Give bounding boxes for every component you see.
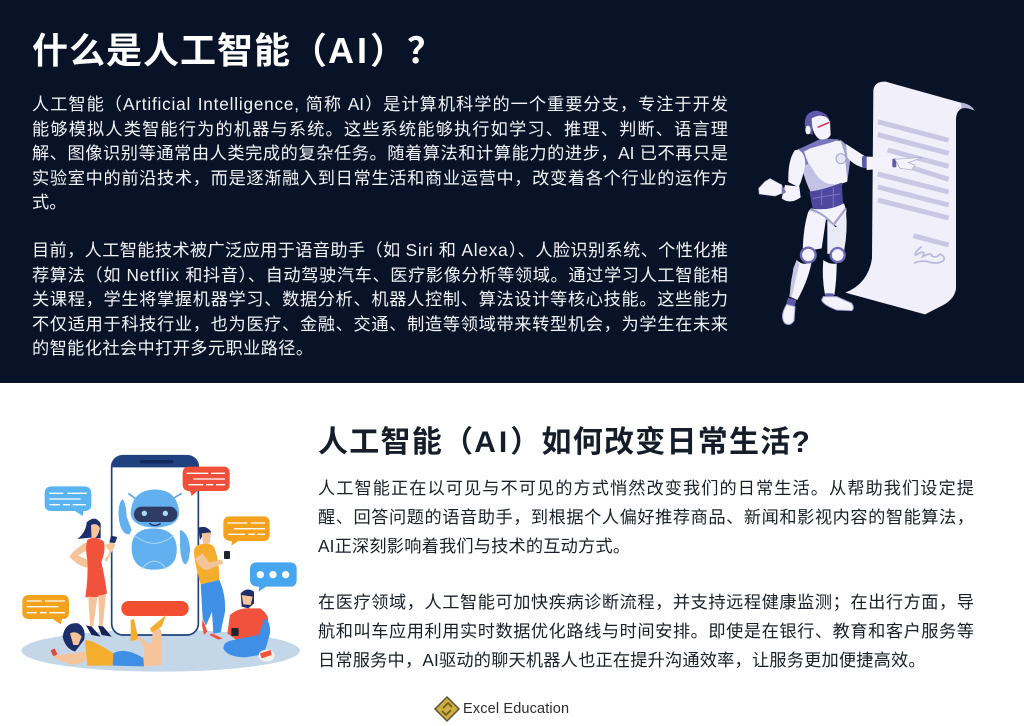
- person: standing man in yellow: [194, 527, 230, 640]
- heading: AI in daily life: 人工智能（AI）如何改变日常生活?: [318, 426, 811, 459]
- text block: AI definition: 式。: [32, 192, 66, 212]
- speech bubble: red top: [183, 467, 230, 496]
- text block: healthcare and transport: 航和叫车应用利用实时数据优化路线与时间安排。即使是在银行、教育和客户服务等: [318, 621, 974, 641]
- text block: daily life intro: 人工智能正在以可见与不可见的方式悄然改变我们的日常生活。从帮助我们设定提: [318, 478, 974, 498]
- speech bubble: orange left: [22, 595, 69, 624]
- brand name: Excel Education: [463, 701, 569, 717]
- speech bubble: blue left: [45, 486, 91, 516]
- ground ellipse: [21, 630, 300, 672]
- text block: AI applications: 目前，人工智能技术被广泛应用于语音助手（如 Siri 和 Alexa）、人脸识别系统、个性化推: [32, 240, 728, 260]
- person: woman lying down: [50, 615, 166, 666]
- text block: AI applications: [32, 240, 728, 358]
- document scroll: [845, 82, 974, 314]
- text block: daily life intro: 醒、回答问题的语音助手，到根据个人偏好推荐商品、新闻和影视内容的智能算法，: [318, 507, 974, 527]
- text block: AI definition: 解、图像识别等通常由人类完成的复杂任务。随着算法和计算能力的进步，AI 已不再只是: [32, 143, 728, 163]
- text block: AI applications: 的智能化社会中打开多元职业路径。: [32, 338, 313, 358]
- text block: healthcare and transport: 在医疗领域，人工智能可加快疾病诊断流程，并支持远程健康监测；在出行方面，导: [318, 592, 974, 612]
- speech bubble: blue dots: [250, 562, 297, 592]
- text block: AI definition: [32, 94, 728, 212]
- text block: daily life intro: [318, 478, 974, 556]
- text block: daily life intro: AI正深刻影响着我们与技术的互动方式。: [318, 536, 630, 556]
- text block: healthcare and transport: 日常服务中，AI驱动的聊天机器人也正在提升沟通效率，让服务更加便捷高效。: [318, 650, 926, 670]
- footer logo: Excel Education: [434, 696, 569, 722]
- illustration: robot pointing at document: [758, 82, 974, 325]
- person: seated man in red: [223, 590, 275, 662]
- text block: AI definition: 实验室中的前沿技术，而是逐渐融入到日常生活和商业运营中，改变着各个行业的运作方: [32, 168, 728, 188]
- person: woman in red dress: [69, 519, 117, 637]
- robot figure: [759, 111, 923, 325]
- title: 什么是人工智能（AI）？: [32, 30, 444, 71]
- panel: dark header section: [0, 0, 1024, 383]
- illustration: people chatting with phone chatbot: [21, 454, 300, 672]
- icon: gold diamond: [434, 696, 460, 722]
- speech bubble: orange right: [223, 516, 270, 546]
- text block: AI definition: 能够模拟人类智能行为的机器与系统。这些系统能够执行如学习、推理、判断、语言理: [32, 118, 728, 138]
- text block: AI applications: 荐算法（如 Netflix 和抖音）、自动驾驶汽车、医疗影像分析等领域。通过学习人工智能相: [32, 264, 728, 284]
- phone with chatbot: [112, 456, 198, 635]
- text block: AI applications: 不仅适用于科技行业，也为医疗、金融、交通、制造等领域带来转型机会，为学生在未来: [32, 314, 728, 334]
- text block: AI applications: 关课程，学生将掌握机器学习、数据分析、机器人控制、算法设计等核心技能。这些能力: [32, 289, 728, 309]
- text block: AI definition: 人工智能（Artificial Intelligence, 简称 AI）是计算机科学的一个重要分支，专注于开发: [32, 94, 728, 114]
- text block: healthcare and transport: [318, 592, 974, 670]
